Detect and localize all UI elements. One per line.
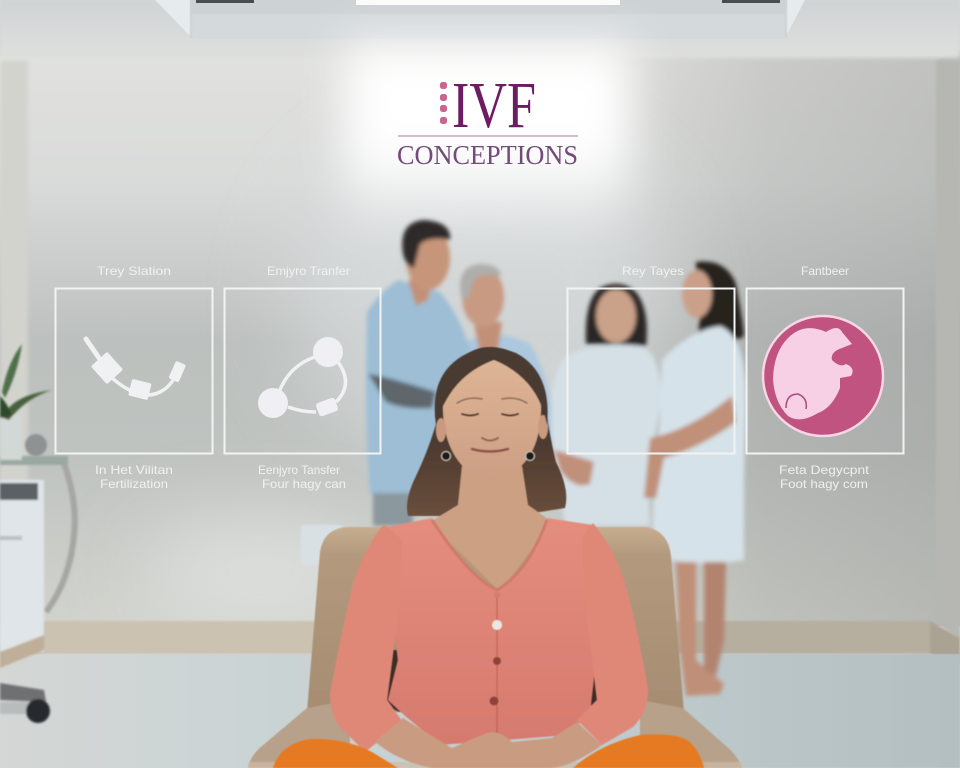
- hair top: [435, 348, 548, 425]
- process panel frames: [56, 264, 904, 491]
- neckline band: [432, 520, 547, 590]
- panel: fetal development: [746, 264, 904, 491]
- panel: embryo transfer: Emjyro Tranfer: [267, 264, 350, 278]
- icon: linked embryo circles: [258, 337, 346, 418]
- background staff: [366, 220, 746, 696]
- logo: [397, 69, 578, 170]
- neck and chest: [430, 466, 552, 592]
- ceiling: [0, 0, 960, 58]
- face: [443, 360, 541, 480]
- dark gaps between arms and torso: [386, 650, 606, 712]
- wall socket plate: [301, 525, 343, 565]
- panel: embryo transfer: Four hagy can: [262, 477, 346, 491]
- panel: tray tayes: [568, 264, 734, 454]
- left cabinet and stool: [0, 456, 75, 723]
- panel: tray station: Fertilization: [100, 477, 168, 491]
- panel: tray station: [56, 264, 212, 491]
- panel: tray station: In Het Vilitan: [95, 463, 173, 477]
- face features: [457, 398, 527, 452]
- orange trousers: [273, 739, 398, 768]
- left sleeve: [330, 524, 403, 752]
- hands and forearms: [375, 718, 602, 768]
- floor: [0, 654, 960, 768]
- panel: tray tayes: Rey Tayes: [622, 264, 684, 278]
- right sleeve: [577, 523, 648, 745]
- panel: embryo transfer: [224, 264, 380, 491]
- younger doctor: [366, 220, 470, 526]
- shirt buttons: [490, 592, 502, 706]
- shirt placket: [496, 592, 498, 735]
- nurse side: [644, 261, 746, 696]
- nurse front: [551, 284, 662, 526]
- hair back: [407, 347, 566, 516]
- icon: catheter: [86, 339, 186, 400]
- icon: fetus in circle: [763, 316, 883, 436]
- logo subtitle: CONCEPTIONS: [397, 140, 578, 170]
- panel: fetal development: Foot hagy com: [780, 477, 868, 491]
- armchair: [248, 527, 742, 768]
- panel: tray station: Trey Slation: [97, 264, 171, 278]
- plant: [0, 344, 52, 460]
- torso: [382, 518, 602, 745]
- older doctor: [458, 264, 552, 480]
- logo dots: [440, 82, 447, 124]
- logo wordmark: IVF: [452, 69, 536, 142]
- woman meditating: [273, 347, 704, 768]
- panel: fetal development: Fantbeer: [801, 264, 849, 278]
- baseboard: [0, 621, 960, 670]
- panel: embryo transfer: Eenjyro Tansfer: [258, 463, 340, 477]
- ears: [436, 415, 548, 442]
- earrings: [442, 452, 534, 460]
- panel: fetal development: Feta Degycpnt: [779, 463, 870, 477]
- wall light glow: [345, 44, 630, 234]
